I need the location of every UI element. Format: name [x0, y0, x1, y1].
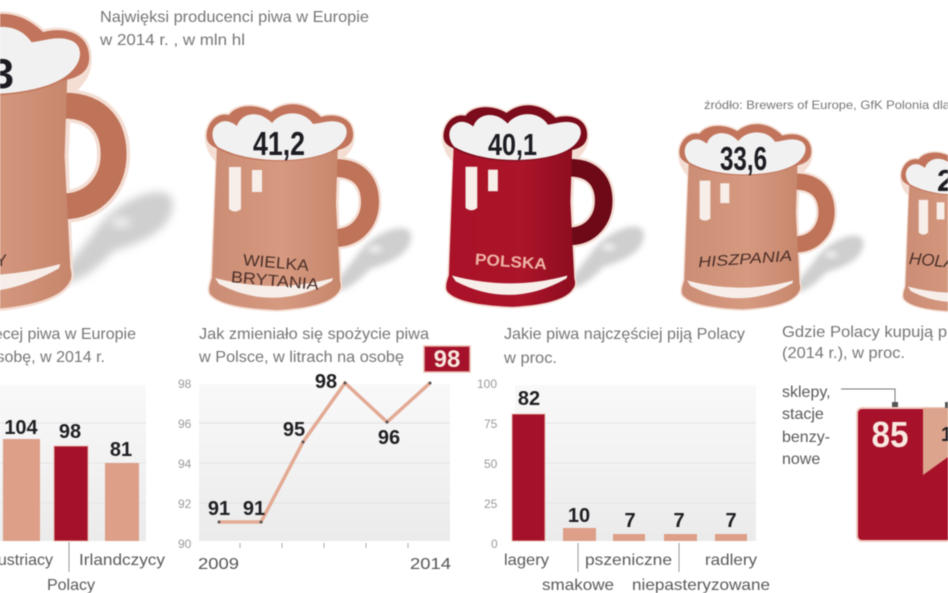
line chart: consumption 2009-2014: 95 — [283, 419, 305, 441]
line chart: consumption 2009-2014: 90 — [178, 537, 192, 551]
line chart: consumption 2009-2014 — [178, 346, 470, 573]
source note: źródło: Brewers of Europe, GfK Polonia dla — [704, 98, 948, 112]
heading: consumption in Poland: Jak zmieniało się spożycie piwa — [199, 326, 429, 343]
panel: consumption in Europe — [0, 326, 165, 593]
chart: share of purchases — [857, 402, 948, 541]
bar chart: beer types: 0 — [491, 537, 498, 551]
panel: beer types — [477, 326, 770, 593]
heading: where Poles buy beer: (2014 r.), w proc. — [782, 345, 905, 362]
bar chart: beer types — [477, 377, 770, 593]
bar chart: beer types: lagery — [504, 552, 549, 569]
line chart: consumption 2009-2014: 2014 — [410, 556, 451, 573]
bar chart: consumption per capita: 81 — [110, 439, 132, 461]
label: shops and petrol stations: sklepy, — [782, 384, 831, 401]
heading: beer types — [503, 326, 745, 367]
bar chart: beer types: 50 — [484, 457, 498, 471]
bar chart: beer types: 75 — [484, 417, 498, 431]
callout: latest value 98: 98 — [434, 346, 460, 373]
line chart: consumption 2009-2014: 96 — [378, 427, 400, 449]
line chart: consumption 2009-2014: 92 — [178, 497, 192, 511]
label: shops and petrol stations: benzy- — [782, 429, 830, 446]
bar chart: beer types: pszeniczne — [585, 552, 672, 569]
panel: where Poles buy beer — [782, 324, 948, 541]
title: largest beer producers: Najwięksi producenci piwa w Europie — [100, 9, 369, 26]
chart: share of purchases: 85 — [872, 414, 908, 455]
line chart: consumption 2009-2014: 2009 — [198, 556, 239, 573]
mug: Wielka Brytania: WIELKA — [242, 252, 310, 275]
line chart: consumption 2009-2014: 98 — [315, 371, 337, 393]
title: largest beer producers: w 2014 r. , w mln hl — [99, 32, 245, 49]
mug: Wielka Brytania: BRYTANIA — [230, 269, 320, 294]
line chart: consumption 2009-2014: 96 — [178, 417, 192, 431]
bar chart: consumption per capita — [0, 385, 165, 593]
heading: consumption in Poland — [198, 326, 429, 366]
bar chart: consumption per capita: 98 — [59, 421, 81, 443]
heading: beer types: w proc. — [503, 350, 557, 367]
bar chart: beer types: 7 — [673, 510, 685, 532]
mug: Niemcy — [0, 14, 173, 310]
mug: Wielka Brytania: 41,2 — [253, 125, 305, 162]
mug: Polska: POLSKA — [474, 252, 548, 274]
bar chart: consumption per capita: 104 — [4, 417, 39, 439]
mug: Hiszpania: 33,6 — [720, 140, 767, 177]
bar chart: consumption per capita: Irlandczycy — [79, 552, 165, 569]
mug: Holandia — [901, 151, 948, 311]
heading: consumption in Poland: w Polsce, w litrach na osobę — [198, 349, 404, 366]
line chart: consumption 2009-2014: 91 — [243, 498, 265, 520]
title: largest beer producers — [99, 9, 369, 49]
label: shops and petrol stations: stacje — [782, 406, 824, 423]
mug: Polska: 40,1 — [488, 127, 537, 162]
callout: latest value 98 — [424, 346, 470, 373]
heading: consumption in Europe — [0, 326, 136, 366]
mug: Hiszpania: HISZPANIA — [698, 248, 793, 271]
line chart: consumption 2009-2014: 91 — [208, 498, 230, 520]
bar chart: beer types: 7 — [624, 510, 636, 532]
bar chart: beer types: radlery — [705, 552, 757, 569]
bar chart: beer types: 7 — [725, 510, 737, 532]
line chart: consumption 2009-2014: 94 — [178, 457, 192, 471]
label: shops and petrol stations — [782, 384, 898, 468]
heading: beer types: Jakie piwa najczęściej piją Polacy — [504, 326, 745, 343]
line chart: consumption 2009-2014: 98 — [178, 377, 192, 391]
label: shops and petrol stations: nowe — [782, 451, 820, 468]
bar chart: beer types: 25 — [484, 497, 498, 511]
mug: Hiszpania — [679, 124, 863, 309]
bar chart: beer types: 100 — [477, 377, 497, 391]
mug: Wielka Brytania — [206, 104, 411, 310]
heading: where Poles buy beer — [782, 324, 948, 362]
bar chart: beer types: 82 — [518, 388, 540, 410]
mug: Polska — [443, 105, 644, 307]
panel: consumption in Poland — [178, 326, 470, 573]
bar chart: beer types: 10 — [568, 505, 590, 527]
